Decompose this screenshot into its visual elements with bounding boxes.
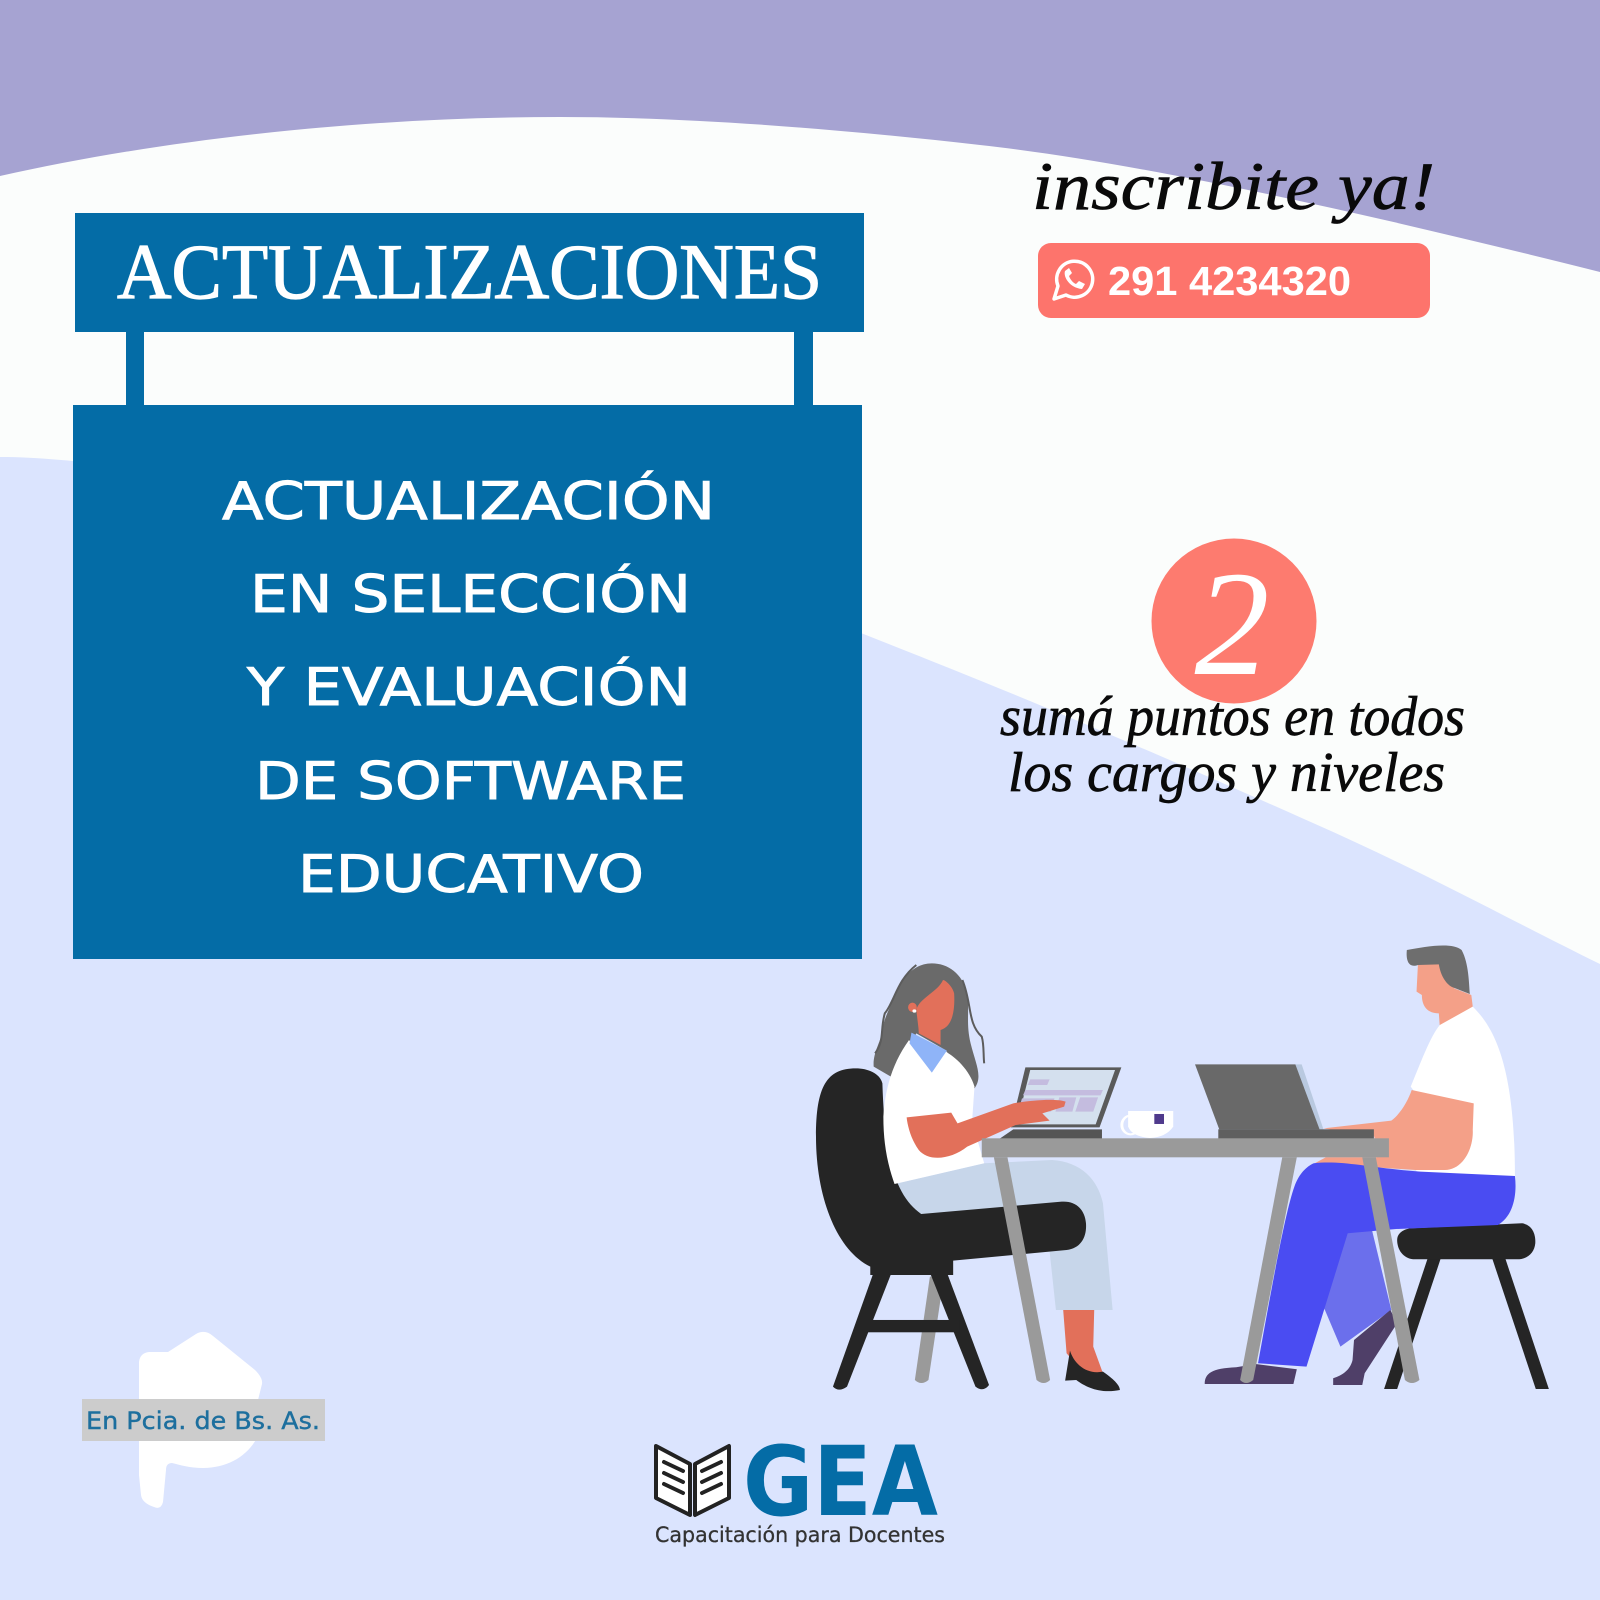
icon: Buenos Aires province map [139,1332,262,1508]
man: trousers [1258,1163,1516,1367]
label background [82,1399,325,1441]
man: shirt [1411,1007,1515,1176]
pill background [1038,243,1430,318]
man: back leg [1323,1230,1391,1347]
tagline: Capacitación para Docentes [655,1523,945,1547]
text block: course name: EN SELECCIÓN [250,563,691,625]
woman: shirt [883,1040,984,1184]
man: arm [1315,1090,1474,1170]
man: front shoe [1205,1364,1297,1384]
table [982,1138,1419,1383]
chair [816,1068,1086,1390]
illustration: two people working at a table [816,945,1549,1391]
woman: face and neck [908,980,954,1045]
title banner [75,213,864,332]
wordmark: GEA [743,1426,938,1538]
location tag: province map and label [82,1332,325,1508]
woman: laptop [996,1067,1121,1141]
heading: ACTUALIZACIONES: ACTUALIZACIONES [117,228,822,315]
background: lower lavender wave [0,457,1600,1600]
contact pill: WhatsApp number [1038,243,1430,318]
background: top purple wave [0,0,1600,272]
badge: number 2 [1152,538,1316,707]
phone number: 291 4234320 [1108,258,1351,304]
text block: course name: DE SOFTWARE [255,752,686,812]
text block: suma puntos: los cargos y niveles [1008,742,1445,804]
main panel [73,405,862,959]
icon: open book [656,1446,729,1515]
text block: course name: ACTUALIZACIÓN [222,470,715,532]
man: hair [1407,945,1470,994]
man: laptop [1195,1064,1374,1141]
table rear leg [915,1277,944,1383]
label text: En Pcia. de Bs. As. [86,1407,320,1435]
woman: arm [907,1100,1066,1158]
woman: trousers [895,1160,1113,1310]
callout: inscribite ya: inscribite ya! [1032,148,1435,224]
man: back shoe [1333,1310,1397,1385]
sign posts [126,330,813,407]
woman: lower leg and shoe [1063,1310,1120,1391]
text block: course name: Y EVALUACIÓN [246,656,691,718]
logo: GEA [655,1426,945,1547]
text block: course name [222,470,715,905]
woman: hair [874,963,984,1088]
text block: course name: EDUCATIVO [298,845,644,905]
cup of tea [1122,1111,1173,1138]
stool [1384,1223,1549,1389]
text block: suma puntos: sumá puntos en todos [1000,686,1465,748]
text block: suma puntos [1000,686,1465,804]
badge: number 2: 2 [1194,541,1270,707]
woman: collar [910,1033,947,1073]
icon: WhatsApp [1054,261,1093,299]
man: head [1417,963,1473,1027]
panel: sign with title and course description [73,213,864,959]
